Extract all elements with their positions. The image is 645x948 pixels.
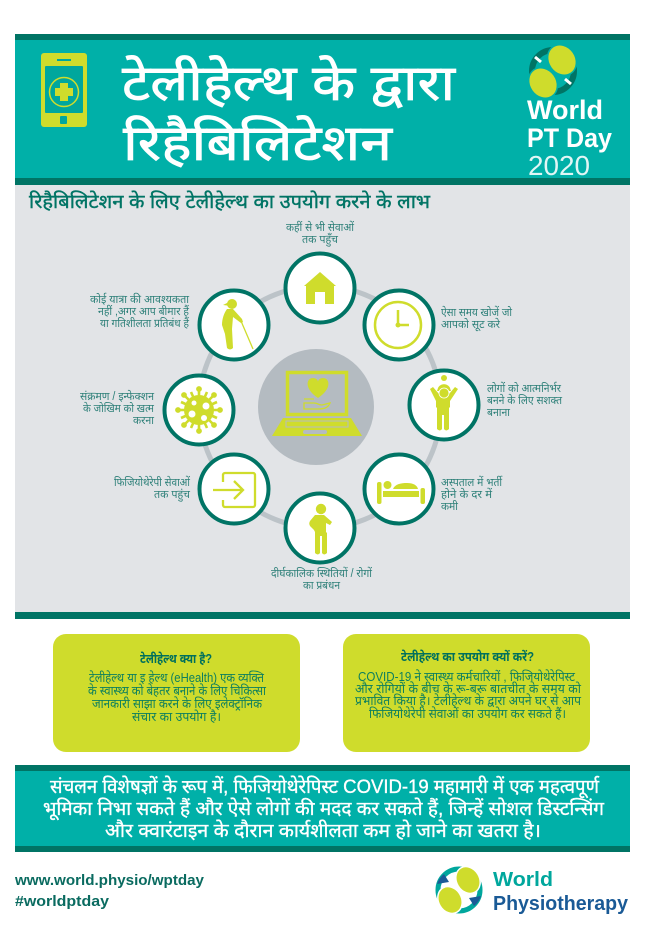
label: या गतिशीलता प्रतिबंध हैं <box>100 316 190 330</box>
label: तक पहुँच <box>302 232 339 247</box>
logo: World PT Day 2020: 2020 <box>528 150 590 181</box>
label: संक्रमण / इन्फेक्शन <box>80 390 155 403</box>
banner text: और क्वारंटाइन के दौरान कार्यशीलता कम हो जाने का खतरा है। <box>105 819 541 842</box>
label: बनाना <box>487 407 511 419</box>
label <box>441 305 513 332</box>
panel: what is telehealth <box>53 634 300 752</box>
footer links: www.world.physio/wptday <box>14 873 204 889</box>
title: रिहैबिलिटेशन <box>123 115 393 171</box>
body text: के स्वास्थ्य को बेहतर बनाने के लिए चिकित्सा <box>88 683 267 698</box>
heading: टेलीहेल्थ क्या है? <box>140 651 212 666</box>
label: कोई यात्रा की आवश्यकता <box>90 292 190 306</box>
header banner <box>15 34 630 185</box>
label: दीर्घकालिक स्थितियों / रोगों <box>271 566 373 580</box>
banner text <box>43 775 604 842</box>
label <box>487 381 562 419</box>
benefit: empowering independence <box>410 370 562 440</box>
label: ऐसा समय खोजें जो <box>441 305 513 319</box>
benefit: reduced hospitalisation <box>364 454 503 524</box>
footer links: #worldptday <box>15 894 109 910</box>
icon: house <box>286 254 354 322</box>
benefit: no travel required <box>90 290 268 360</box>
banner: key message <box>15 765 630 852</box>
logo: World PT Day 2020: PT Day <box>527 123 612 153</box>
body text: फिजियोथेरेपी सेवाओं का उपयोग कर सकते हैं। <box>369 706 566 721</box>
logo: World PT Day 2020: World <box>527 95 603 125</box>
body text: और रोगियों के बीच के रू-बरू बातचीत के समय को <box>355 681 582 696</box>
icon: virus <box>164 376 234 444</box>
icon: person with walking stick <box>200 290 268 360</box>
body text <box>355 669 582 721</box>
label: आपको सूट करे <box>441 318 500 332</box>
icon: clock <box>364 290 434 360</box>
label: अस्पताल में भर्ती <box>441 475 503 489</box>
logo: World Physiotherapy <box>433 862 629 918</box>
label: फिजियोथेरेपी सेवाओं <box>114 475 190 489</box>
title <box>122 55 456 171</box>
central circle: laptop with heart in hand <box>258 349 374 465</box>
label: लोगों को आत्मनिर्भर <box>487 381 561 395</box>
icon: person lifting child <box>410 370 478 440</box>
icon: smartphone with medical cross <box>41 53 87 127</box>
label: तक पहुंच <box>154 488 191 502</box>
banner text: भूमिका निभा सकते हैं और ऐसे लोगों की मदद कर सकते हैं, जिन्हें सोशल डिस्टन्सिंग <box>43 797 604 821</box>
label <box>90 292 190 330</box>
benefit: managing long-term conditions <box>271 494 373 592</box>
body text: जानकारी साझा करने के लिए इलेक्ट्रॉनिक <box>92 696 262 711</box>
label <box>286 220 354 247</box>
body text: संचार का उपयोग है। <box>132 709 221 724</box>
label: कहीं से भी सेवाओं <box>286 220 354 234</box>
label <box>441 475 503 513</box>
benefit: reduced infection risk <box>80 376 234 444</box>
panel: benefits <box>15 185 630 619</box>
body text: प्रभावित किया है। टेलीहेल्थ के द्वारा अपने घर से आप <box>355 693 582 708</box>
label: का प्रबंधन <box>303 579 341 592</box>
label: के जोखिम को खत्म <box>83 402 155 415</box>
label: करना <box>133 415 155 427</box>
label: कमी <box>441 500 459 513</box>
benefit: suitable time <box>364 290 513 360</box>
label <box>114 475 191 502</box>
logo: World Physiotherapy: World <box>493 869 553 891</box>
heading: टेलीहेल्थ का उपयोग क्यों करें? <box>401 649 534 664</box>
label: होने के दर में <box>441 487 493 501</box>
body text: टेलीहेल्थ या इ हेल्थ (eHealth) एक व्यक्ति <box>89 670 265 685</box>
logo: World PT Day 2020 <box>523 39 612 181</box>
label: नहीं ,अगर आप बीमार हैं <box>98 304 190 318</box>
icon: person in bed <box>364 454 434 524</box>
panel: why use telehealth <box>343 634 590 752</box>
panel heading: रिहैबिलिटेशन के लिए टेलीहेल्थ का उपयोग करने के लाभ <box>29 190 431 213</box>
ring connecting benefits <box>199 286 441 528</box>
logo: World Physiotherapy: Physiotherapy <box>493 893 629 915</box>
footer links <box>14 873 204 910</box>
body text: COVID-19 ने स्वास्थ्य कर्मचारियों , फिजियोथेरेपिस्ट <box>358 669 576 684</box>
label <box>80 390 155 427</box>
label: बनने के लिए सशक्त <box>487 394 562 407</box>
benefit: access from anywhere <box>286 220 354 322</box>
icon: enter arrow <box>200 454 268 524</box>
body text <box>88 670 267 724</box>
banner text: संचलन विशेषज्ञों के रूप में, फिजियोथेरेपिस्ट COVID-19 महामारी में एक महत्वपूर्ण <box>50 775 600 799</box>
label <box>271 566 373 592</box>
icon: thinking person <box>286 494 354 562</box>
title: टेलीहेल्थ के द्वारा <box>122 55 456 111</box>
benefit: access to physiotherapy services <box>114 454 268 524</box>
